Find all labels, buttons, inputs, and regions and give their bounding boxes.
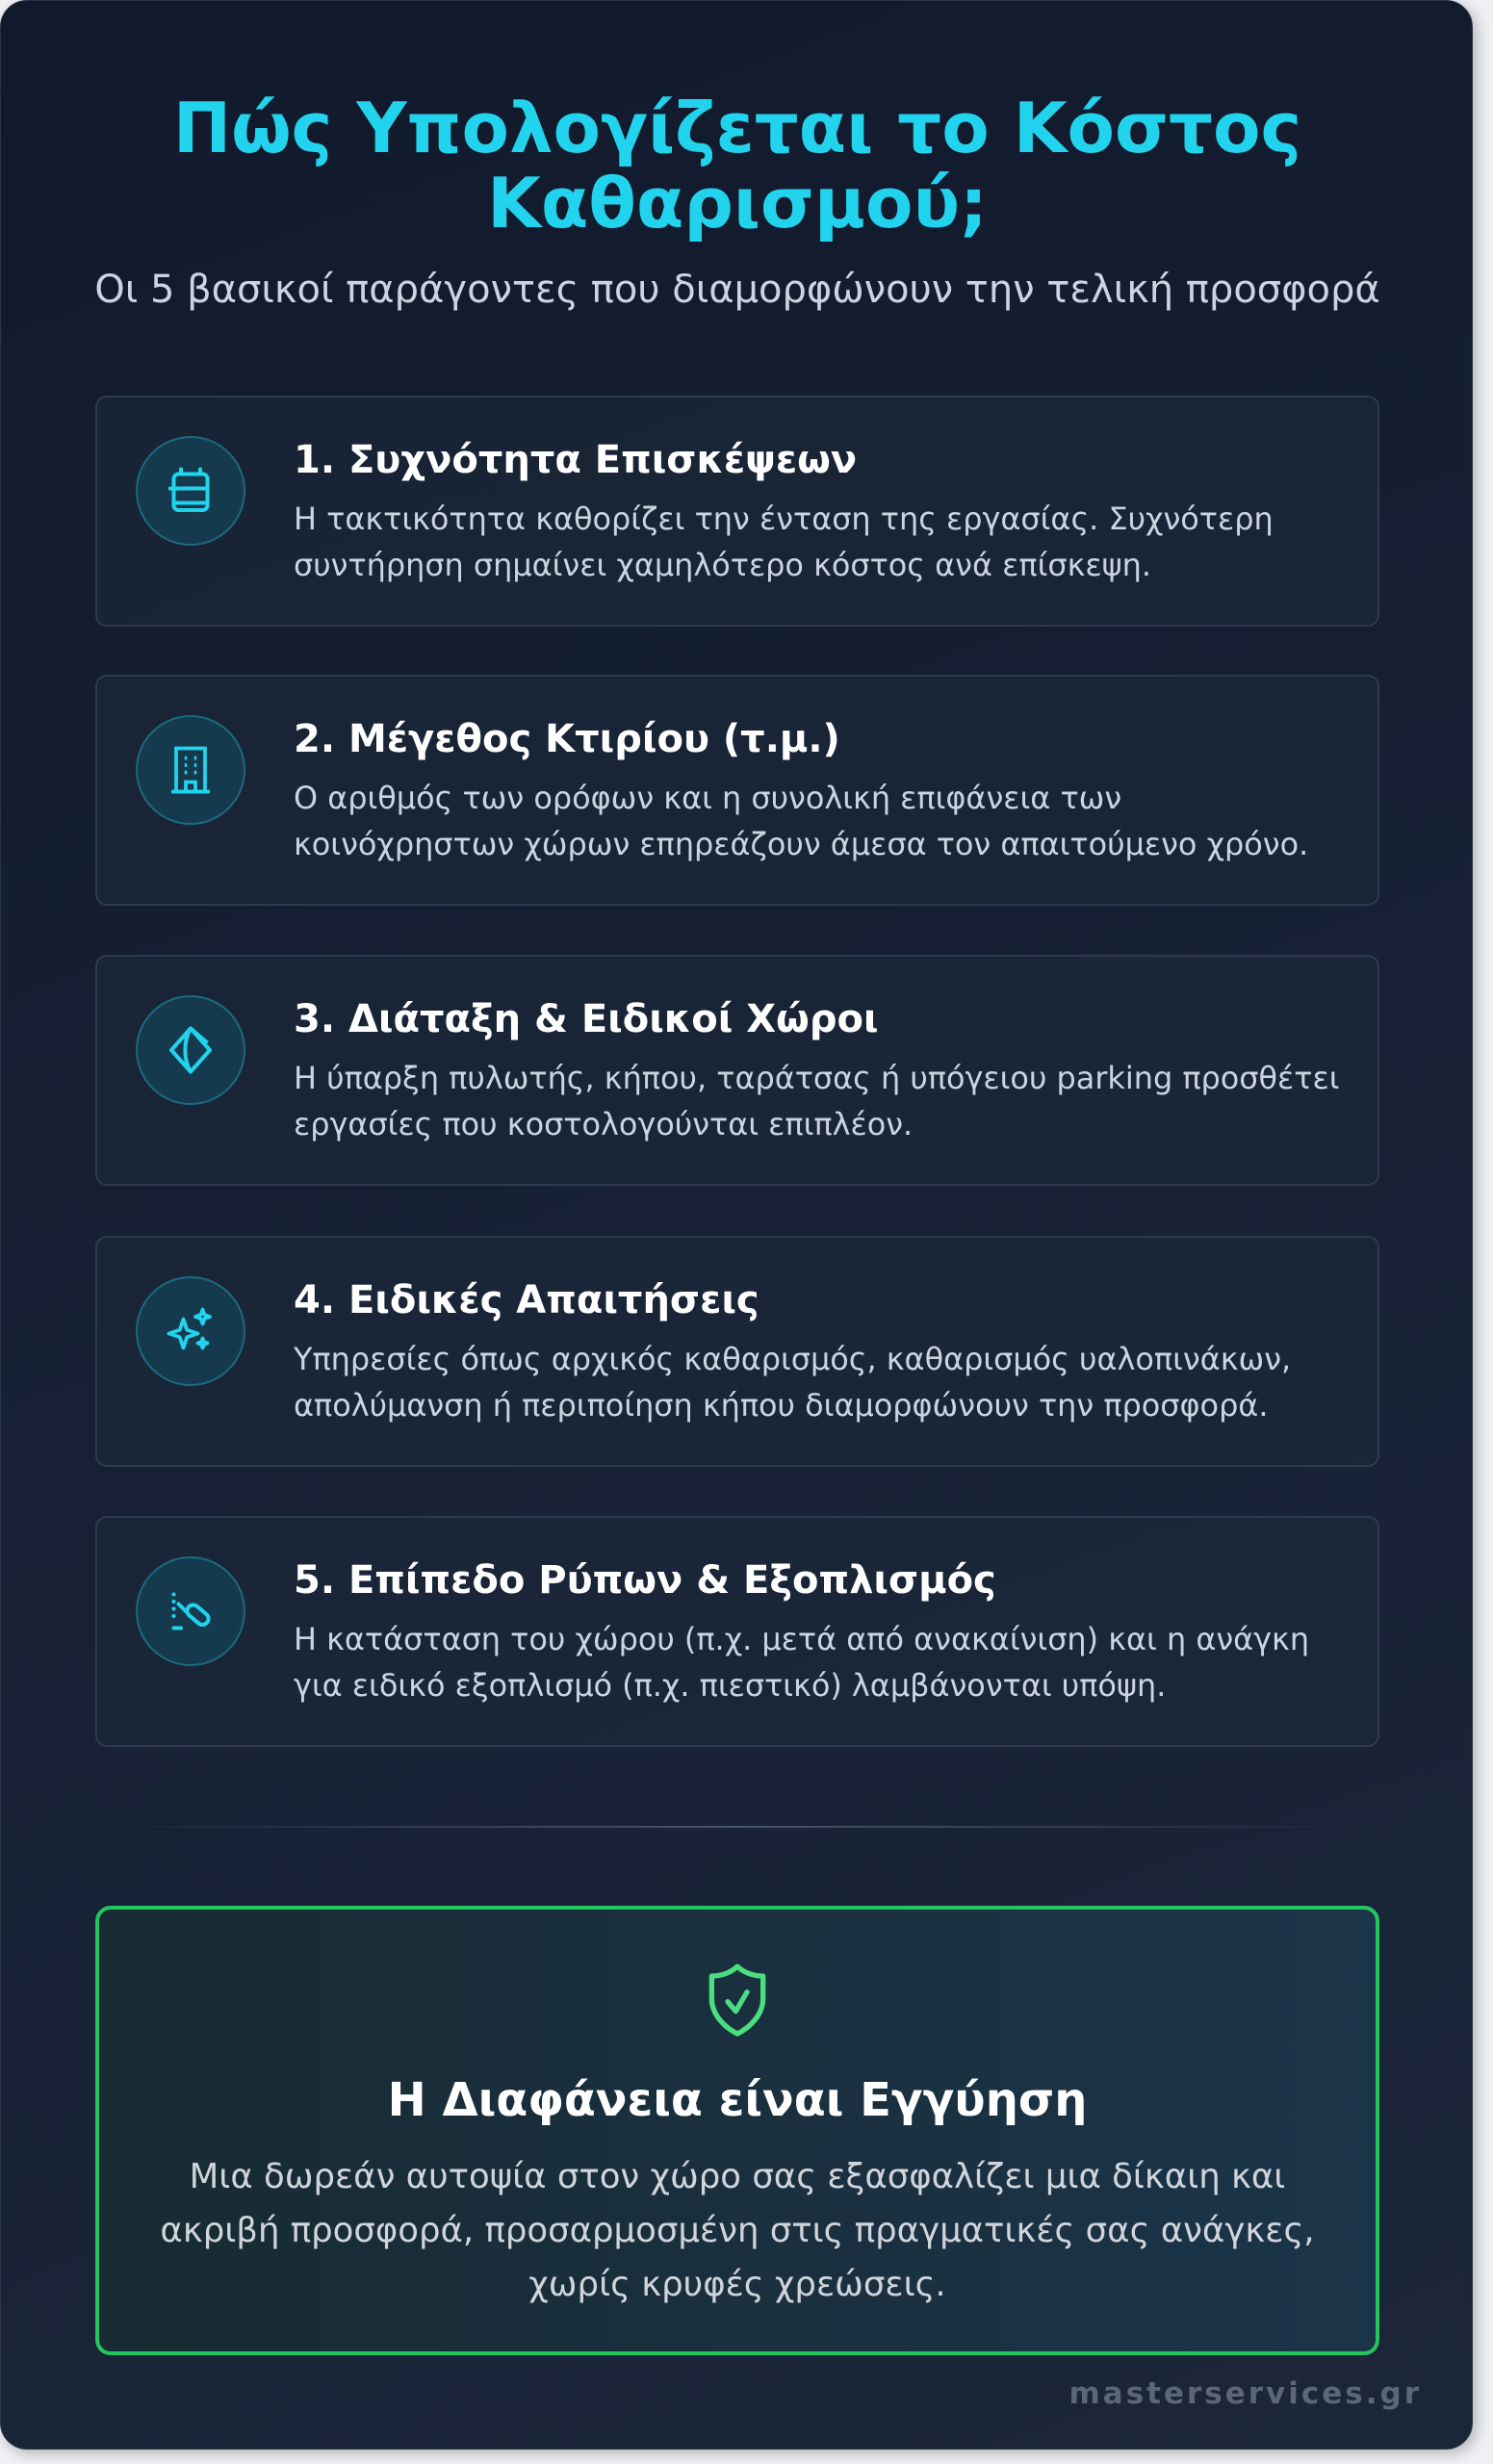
panel: special requirements — [95, 1236, 1379, 1467]
icon: diamond — [136, 995, 245, 1105]
icon: building — [136, 715, 245, 825]
callout text: Μια δωρεάν αυτοψία στον χώρο σας εξασφαλίζει μια δίκαιη και ακριβή προσφορά, προσαρμοσμένη στις πραγματικές σας ανάγκες, χωρίς κρυφές χρεώσεις. — [160, 2157, 1315, 2304]
heading: 4. Ειδικές Απαιτήσεις — [294, 1278, 759, 1322]
description: Η ύπαρξη πυλωτής, κήπου, ταράτσας ή υπόγειου parking προσθέτει εργασίες που κοστολογούνται επιπλέον. — [294, 1060, 1340, 1142]
panel: building size — [95, 675, 1379, 906]
panel: frequency — [95, 396, 1379, 627]
title — [173, 88, 1301, 244]
description: Υπηρεσίες όπως αρχικός καθαρισμός, καθαρισμός υαλοπινάκων, απολύμανση ή περιποίηση κήπου διαμορφώνουν την προσφορά. — [294, 1341, 1291, 1424]
panel: layout — [95, 955, 1379, 1186]
icon: spray — [136, 1556, 245, 1666]
icon: calendar — [136, 436, 245, 546]
footer brand: masterservices.gr — [1068, 2376, 1422, 2411]
panel: dirt level and equipment — [95, 1516, 1379, 1747]
subtitle: Οι 5 βασικοί παράγοντες που διαμορφώνουν την τελική προσφορά — [94, 268, 1380, 312]
callout heading: Η Διαφάνεια είναι Εγγύηση — [388, 2073, 1087, 2127]
description: Η τακτικότητα καθορίζει την ένταση της εργασίας. Συχνότερη συντήρηση σημαίνει χαμηλότερο κόστος ανά επίσκεψη. — [294, 500, 1274, 583]
icon: sparkles — [136, 1276, 245, 1386]
title: Καθαρισμού; — [487, 163, 988, 244]
heading: 2. Μέγεθος Κτιρίου (τ.μ.) — [294, 717, 840, 761]
callout: transparency — [95, 1906, 1379, 2355]
icon: shield check — [708, 1964, 766, 2037]
heading: 3. Διάταξη & Ειδικοί Χώροι — [294, 997, 879, 1041]
title: Πώς Υπολογίζεται το Κόστος — [173, 88, 1301, 168]
heading: 5. Επίπεδο Ρύπων & Εξοπλισμός — [294, 1558, 996, 1603]
description: Η κατάσταση του χώρου (π.χ. μετά από ανακαίνιση) και η ανάγκη για ειδικό εξοπλισμό (π.χ. πιεστικό) λαμβάνονται υπόψη. — [294, 1621, 1309, 1704]
description: Ο αριθμός των ορόφων και η συνολική επιφάνεια των κοινόχρηστων χώρων επηρεάζουν άμεσα τον απαιτούμενο χρόνο. — [294, 780, 1308, 862]
heading: 1. Συχνότητα Επισκέψεων — [294, 438, 857, 482]
